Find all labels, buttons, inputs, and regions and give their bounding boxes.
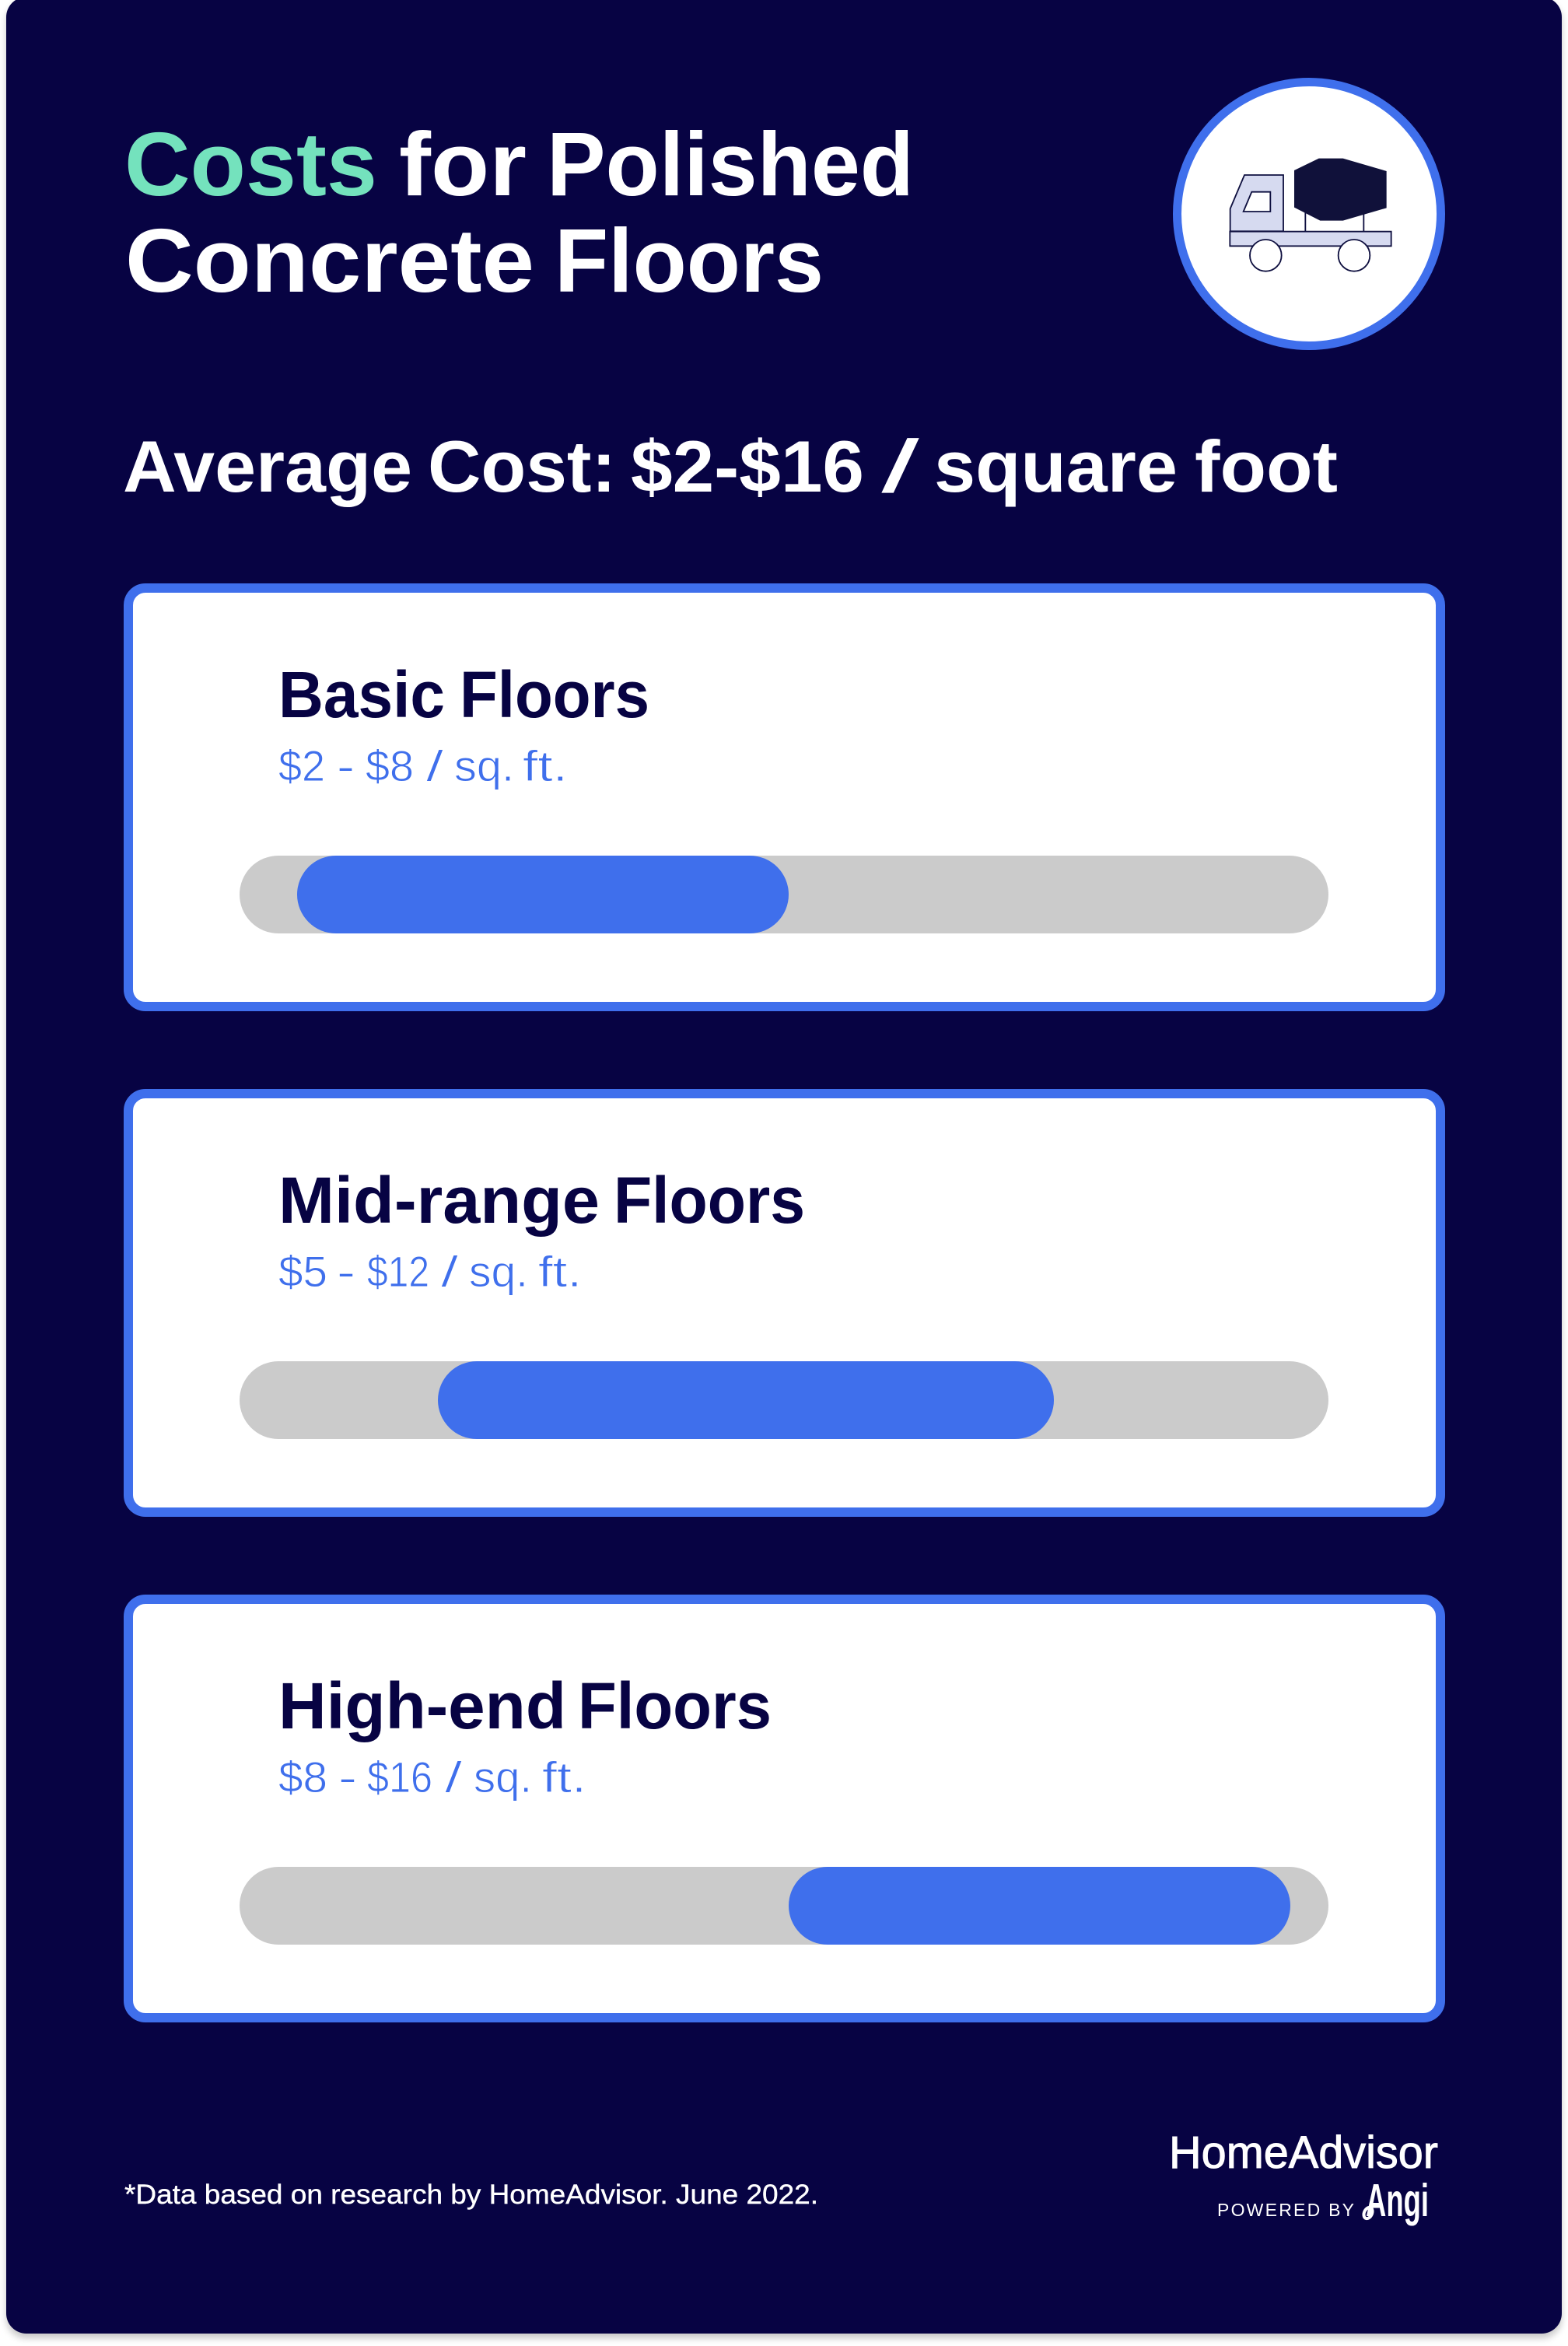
icon: concrete mixer truck [1178,82,1440,345]
logo: HomeAdvisor powered by Angi: HomeAdvisor [1169,2127,1438,2178]
card frame [128,588,1440,1007]
price: mid-range floors: - [337,1247,355,1296]
price: basic floors: ft. [523,741,568,790]
panel: high-end floors [128,1599,1440,2018]
average cost heading: $2-$16 [631,425,864,507]
price: high-end floors: $16 [367,1752,432,1802]
price: high-end floors: - [338,1752,357,1802]
footnote: *Data based on research by HomeAdvisor. June 2022. [124,2180,818,2210]
panel: basic floors [128,588,1440,1007]
title: for [399,114,527,215]
card frame [128,1094,1440,1512]
average cost heading: foot [1195,425,1338,507]
bar range: mid-range floors [438,1361,1054,1439]
title: Floors [555,210,824,311]
heading: high-end floors: High-end [278,1669,566,1742]
price: mid-range floors: / [441,1247,459,1296]
logo: HomeAdvisor powered by Angi: POWERED BY [1217,2200,1354,2220]
bar track: basic floors [240,856,1328,933]
average cost heading [123,425,1338,507]
price: basic floors: $2 [278,741,325,790]
price: high-end floors: sq. [474,1752,532,1802]
title [124,114,914,311]
card frame [128,1599,1440,2018]
heading: mid-range floors [278,1164,805,1237]
logo: HomeAdvisor powered by Angi: Angi [1366,2175,1429,2226]
price: basic floors: sq. [454,741,514,790]
heading: mid-range floors: Mid-range [278,1164,600,1237]
heading: high-end floors: Floors [578,1669,772,1742]
heading: mid-range floors: Floors [614,1164,805,1237]
bar range: basic floors [297,856,789,933]
title: Concrete [125,210,534,311]
price: basic floors [278,741,568,790]
bar range: high-end floors [789,1867,1290,1945]
price: mid-range floors: $12 [367,1247,429,1296]
price: high-end floors: $8 [278,1752,327,1802]
logo: HomeAdvisor powered by Angi [1169,2127,1438,2226]
price: high-end floors [278,1752,586,1802]
price: high-end floors: ft. [542,1752,586,1802]
title: Costs [124,114,377,215]
heading: basic floors: Floors [460,658,649,731]
heading: high-end floors [278,1669,772,1742]
price: high-end floors: / [445,1752,463,1802]
average cost heading: Average [123,425,412,507]
heading: basic floors: Basic [278,658,445,731]
bar track: high-end floors [240,1867,1328,1945]
price: basic floors: $8 [366,741,414,790]
price: mid-range floors: ft. [538,1247,582,1296]
price: basic floors: - [337,741,355,790]
price: mid-range floors: $5 [278,1247,327,1296]
average cost heading: / [883,425,919,507]
price: mid-range floors: sq. [469,1247,528,1296]
bar track: mid-range floors [240,1361,1328,1439]
panel: mid-range floors [128,1094,1440,1512]
price: basic floors: / [426,741,444,790]
average cost heading: square [934,425,1178,507]
heading: basic floors [278,658,649,731]
price: mid-range floors [278,1247,582,1296]
average cost heading: Cost: [428,425,616,507]
title: Polished [547,114,914,215]
